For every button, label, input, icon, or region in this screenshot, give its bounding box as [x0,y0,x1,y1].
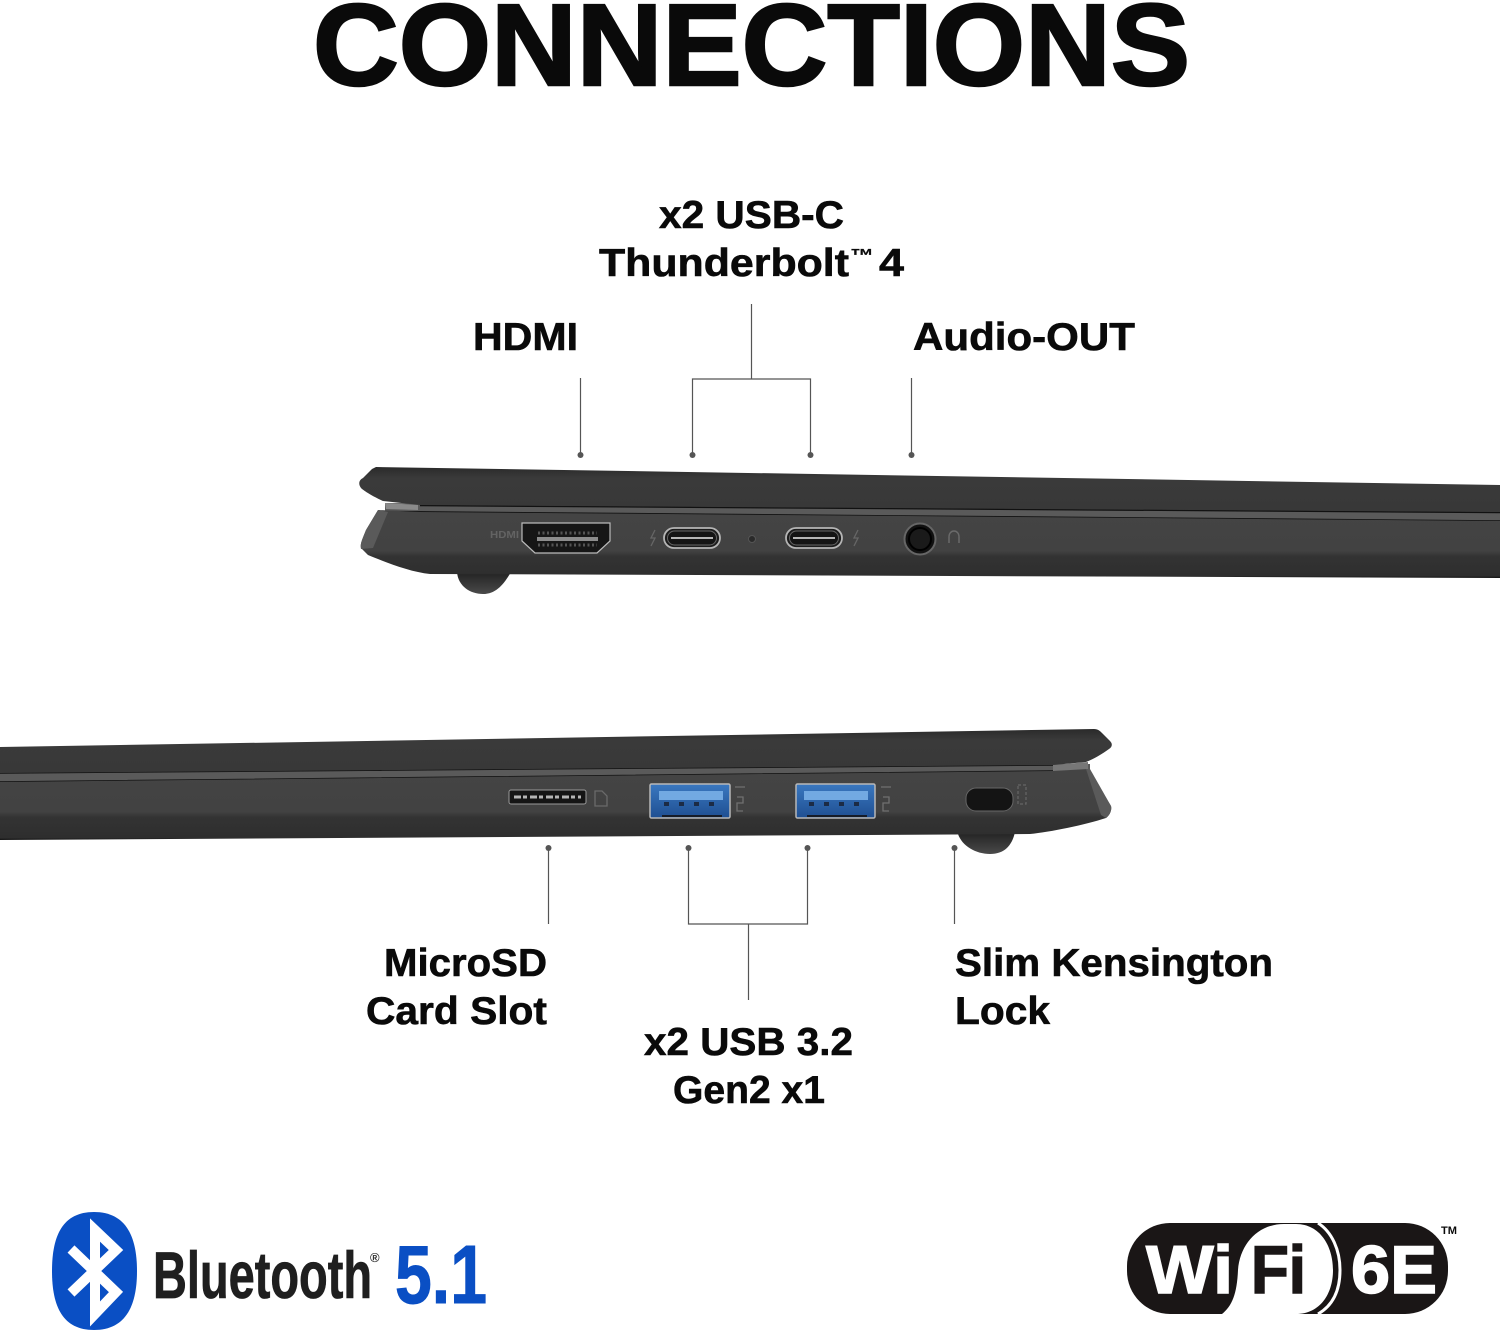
label: USB-C Thunderbolt: x2 USB-C [659,194,844,237]
Wi text: Wi [1146,1232,1233,1308]
lid [359,467,1500,512]
wordmark: Bluetooth [153,1238,372,1312]
trademark: TM [1441,1225,1457,1237]
white Fi panel [1222,1224,1333,1314]
leader: microSD [546,845,552,924]
icon: USB-C port 2 [786,528,858,548]
label: Slim Kensington Lock: Slim Kensington [955,942,1273,985]
logo: Bluetooth 5.1 [52,1212,487,1330]
rubber foot [958,832,1015,854]
registered mark: ® [370,1250,380,1265]
label: MicroSD Card Slot [366,942,547,1033]
icon: Bluetooth shield [52,1212,137,1330]
base [361,510,1500,578]
base [0,769,1111,840]
laptop: left side view [359,467,1500,594]
Fi text: Fi [1251,1232,1306,1308]
label: MicroSD Card Slot: MicroSD [384,942,547,985]
label: Slim Kensington Lock [955,942,1273,1033]
panel outline [1318,1223,1340,1314]
icon: USB-A port 2 [796,784,891,818]
badge [1127,1223,1448,1314]
lid [0,729,1112,773]
label: Audio-OUT: Audio-OUT [913,316,1135,359]
hinge band [0,764,1090,783]
leader: Kensington [952,845,958,924]
icon: HDMI port [490,523,610,553]
icon: audio jack [904,524,959,554]
icon: microSD slot [509,790,607,806]
label: USB 3.2 Gen2 [644,1021,853,1112]
icon: HDMI port: HDMI [490,530,519,541]
label: Slim Kensington Lock: Lock [955,990,1050,1033]
label: MicroSD Card Slot: Card Slot [366,990,547,1033]
indicator light [748,536,756,542]
leader: HDMI [578,378,584,458]
hinge band [385,503,1500,522]
label: USB 3.2 Gen2: Gen2 x1 [673,1069,825,1112]
label: USB-C Thunderbolt [599,194,904,285]
rubber foot [457,572,511,594]
6E text: 6E [1351,1232,1437,1308]
label: USB 3.2 Gen2: x2 USB 3.2 [644,1021,853,1064]
leader: Audio-OUT [908,378,914,458]
laptop: right side view [0,729,1112,854]
icon: USB-C port 1 [651,528,720,548]
label: USB-C Thunderbolt: 4 [879,242,904,285]
icon: Kensington lock slot [966,785,1026,811]
version number: 5.1 [395,1228,487,1321]
leader: USB 3.2 bracket [686,845,810,1000]
label: HDMI: HDMI [473,316,578,359]
leader: USB-C bracket [690,304,814,458]
label: USB-C Thunderbolt: ™ [850,246,874,267]
label: USB-C Thunderbolt: Thunderbolt [599,242,849,285]
icon: USB-A port 1 [650,784,745,818]
logo: Wi-Fi 6E [1127,1223,1457,1314]
